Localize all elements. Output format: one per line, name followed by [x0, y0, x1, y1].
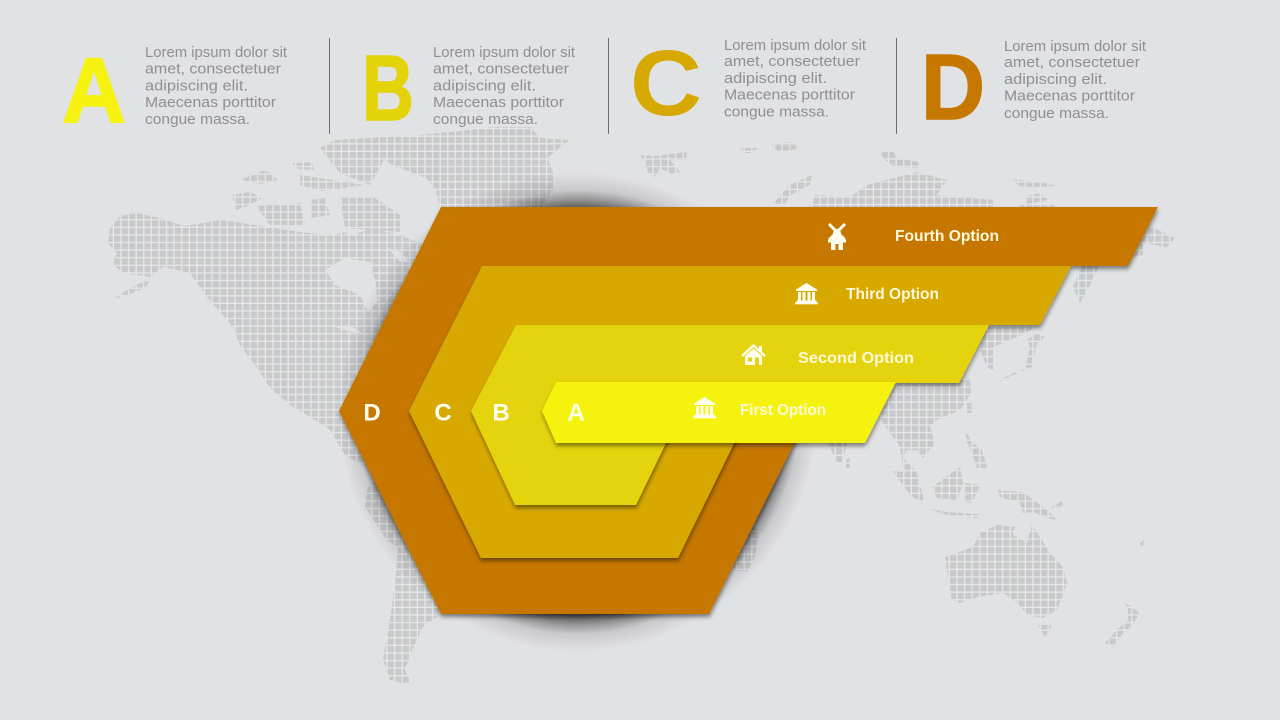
map: Tasmania: [1038, 625, 1052, 637]
map: East Asia: [975, 320, 1040, 370]
map: Japan: [995, 333, 1045, 383]
map: Australia: [945, 525, 1067, 618]
header item B: [362, 36, 575, 140]
letter C: C: [630, 31, 702, 135]
map: South America: [365, 470, 470, 685]
description C: [724, 38, 866, 120]
description A: Maecenas porttitor: [145, 95, 276, 111]
description B: Maecenas porttitor: [433, 95, 564, 111]
shape B: [471, 325, 989, 505]
description D: amet, consectetuer: [1004, 55, 1140, 71]
header item D: [921, 35, 1146, 139]
shape D: [339, 207, 1158, 614]
map: South-East Asia: [878, 378, 971, 497]
map: eastern Russia: [1120, 223, 1175, 260]
description C: Lorem ipsum dolor sit: [724, 38, 866, 54]
description C: Maecenas porttitor: [724, 88, 855, 104]
icon: bank: [795, 283, 818, 304]
header item A: [62, 38, 287, 142]
chevron C: third option: [409, 266, 1071, 558]
letter A: A: [62, 38, 126, 142]
description B: adipiscing elit.: [433, 78, 536, 94]
map: Arctic islands: [232, 162, 400, 232]
description D: congue massa.: [1004, 106, 1109, 122]
label: Third Option: Third Option: [846, 286, 939, 303]
map: North America: [108, 213, 440, 470]
world map: [108, 127, 1175, 685]
description A: [145, 45, 287, 128]
map: Philippines: [965, 430, 987, 468]
description B: Lorem ipsum dolor sit: [433, 45, 575, 61]
map: Kamchatka: [1073, 264, 1100, 303]
label: Second Option: Second Option: [798, 350, 914, 367]
map: India: [825, 438, 851, 468]
shape C: [409, 266, 1071, 558]
letter D: D: [921, 35, 985, 139]
label A: A: [567, 400, 585, 426]
map: Greenland: [320, 127, 570, 210]
label B: B: [492, 400, 510, 426]
chevron B: second option: [471, 325, 989, 505]
map: New Guinea: [997, 490, 1144, 546]
shape A: [542, 382, 896, 443]
description C: congue massa.: [724, 104, 829, 120]
description D: Maecenas porttitor: [1004, 88, 1135, 104]
map: Africa tip: [700, 520, 758, 572]
description D: adipiscing elit.: [1004, 72, 1107, 88]
icon: windmill: [828, 224, 846, 250]
description A: amet, consectetuer: [145, 62, 281, 78]
description B: congue massa.: [433, 112, 538, 128]
label C: C: [434, 400, 452, 426]
icon: bank small: [693, 397, 716, 418]
description A: Lorem ipsum dolor sit: [145, 45, 287, 61]
map: Alaska peninsula: [115, 280, 150, 298]
description B: [433, 45, 575, 128]
header item C: [630, 31, 866, 135]
description A: adipiscing elit.: [145, 78, 248, 94]
description D: [1004, 39, 1146, 122]
map: Indonesia: [892, 403, 987, 518]
map: New Zealand: [1105, 603, 1140, 647]
description C: adipiscing elit.: [724, 71, 827, 87]
description A: congue massa.: [145, 112, 250, 128]
description B: amet, consectetuer: [433, 62, 569, 78]
label: Fourth Option: Fourth Option: [895, 228, 999, 245]
letter B: B: [362, 36, 414, 140]
chevron A: first option: [542, 382, 896, 443]
label: First Option: First Option: [740, 402, 826, 419]
icon: house: [742, 346, 765, 365]
map: northern Europe: [640, 142, 812, 205]
circular shadow behind chevrons: [338, 172, 818, 652]
map: Russia and Asia top: [810, 150, 1060, 210]
description C: amet, consectetuer: [724, 54, 860, 70]
label D: D: [363, 400, 381, 426]
description D: Lorem ipsum dolor sit: [1004, 39, 1146, 55]
